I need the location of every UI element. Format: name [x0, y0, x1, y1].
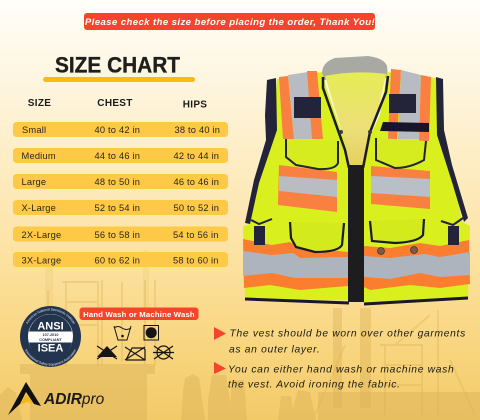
note 2: You can either hand wash or machine wash: [228, 364, 454, 376]
row: 3X-Large: 58 to 60 in: [173, 256, 219, 266]
row: Small: 40 to 42 in: [94, 125, 140, 135]
ANSI badge: International Safety Equipment Association: [25, 349, 76, 366]
construction silhouette: [0, 250, 480, 420]
icon: wash tub: [114, 326, 131, 340]
logo mark: [8, 382, 41, 415]
row: Medium: 44 to 46 in: [94, 151, 140, 161]
collar snaps: [339, 130, 372, 134]
notice banner: [84, 13, 376, 30]
right black side trim: [436, 77, 468, 222]
table header: [28, 98, 207, 110]
wash instruction label: [80, 308, 198, 320]
inner neck lining: [325, 72, 386, 165]
chest pocket flaps: [286, 138, 426, 169]
pocket snaps: [378, 248, 384, 254]
right shoulder reflective stripe: [388, 69, 431, 141]
row: Medium: 42 to 44 in: [174, 151, 219, 161]
left badge patch: [294, 97, 321, 118]
note 1 continued: as an outer layer.: [229, 345, 320, 356]
ANSI badge: 107-2010: [42, 333, 59, 337]
row: X-Large: 50 to 52 in: [174, 203, 219, 213]
logo: ADIRpro: [43, 391, 105, 408]
logo: [8, 382, 105, 415]
right badge patch: [389, 94, 416, 113]
vest body: [243, 72, 349, 300]
icon: tumble dry: [144, 326, 158, 340]
note 2 continued: the vest. Avoid ironing the fabric.: [228, 379, 401, 390]
hem binding: [245, 298, 468, 304]
row: Medium: Medium: [22, 151, 56, 161]
row: Small: 38 to 40 in: [174, 125, 220, 135]
left chest reflective band: [278, 165, 337, 212]
centre zipper: [348, 165, 364, 302]
row: X-Large: [13, 200, 228, 215]
row: 2X-Large: 2X-Large: [22, 230, 61, 240]
row: 3X-Large: 3X-Large: [22, 256, 61, 266]
row: X-Large: 52 to 54 in: [94, 203, 140, 213]
size table: [13, 122, 228, 267]
row: 3X-Large: [13, 252, 228, 267]
ANSI badge: ANSI: [37, 320, 64, 332]
title: SIZE CHART: [55, 52, 181, 78]
left collar piping: [323, 77, 349, 168]
icon: no wring: [153, 346, 174, 359]
right chest reflective band: [371, 166, 430, 209]
row: Medium: [13, 148, 228, 163]
table header: CHEST: [97, 98, 133, 109]
arrow bullet: [214, 327, 226, 340]
wash instruction label: Hand Wash or Machine Wash: [83, 310, 195, 319]
notice banner: Please check the size before placing the order, Thank You!: [85, 17, 376, 28]
row: Large: [13, 174, 228, 189]
row: Small: Small: [22, 125, 46, 135]
care notes: [214, 327, 466, 390]
arrow bullet: [214, 362, 226, 374]
right collar piping: [363, 76, 388, 168]
lower pocket flaps: [290, 219, 424, 252]
icon: no iron: [125, 347, 145, 360]
left shoulder reflective stripe: [279, 71, 323, 139]
left black side trim: [245, 78, 277, 224]
row: 2X-Large: 54 to 56 in: [173, 230, 219, 240]
row: 2X-Large: [13, 226, 228, 242]
row: Large: 46 to 46 in: [174, 177, 219, 187]
row: 3X-Large: 60 to 62 in: [94, 256, 140, 266]
row: Large: Large: [22, 177, 46, 187]
safety vest illustration: [243, 56, 470, 304]
ANSI badge: [20, 306, 81, 367]
row: 2X-Large: 56 to 58 in: [94, 230, 140, 240]
lower reflective bands: [243, 239, 470, 290]
table header: SIZE: [28, 98, 51, 109]
collar: [322, 56, 388, 80]
table header: HIPS: [183, 100, 207, 110]
ANSI badge: COMPLIANT: [39, 338, 62, 342]
note 1: The vest should be worn over other garments: [230, 328, 466, 340]
icon: no bleach: [97, 346, 117, 359]
right pen slit: [380, 122, 429, 132]
ANSI badge: ISEA: [38, 343, 63, 355]
side straps: [254, 226, 265, 245]
ANSI badge: American National Standards Institute: [26, 308, 75, 324]
row: X-Large: X-Large: [22, 203, 56, 213]
row: Large: 48 to 50 in: [94, 177, 140, 187]
row: Small: [13, 122, 228, 137]
